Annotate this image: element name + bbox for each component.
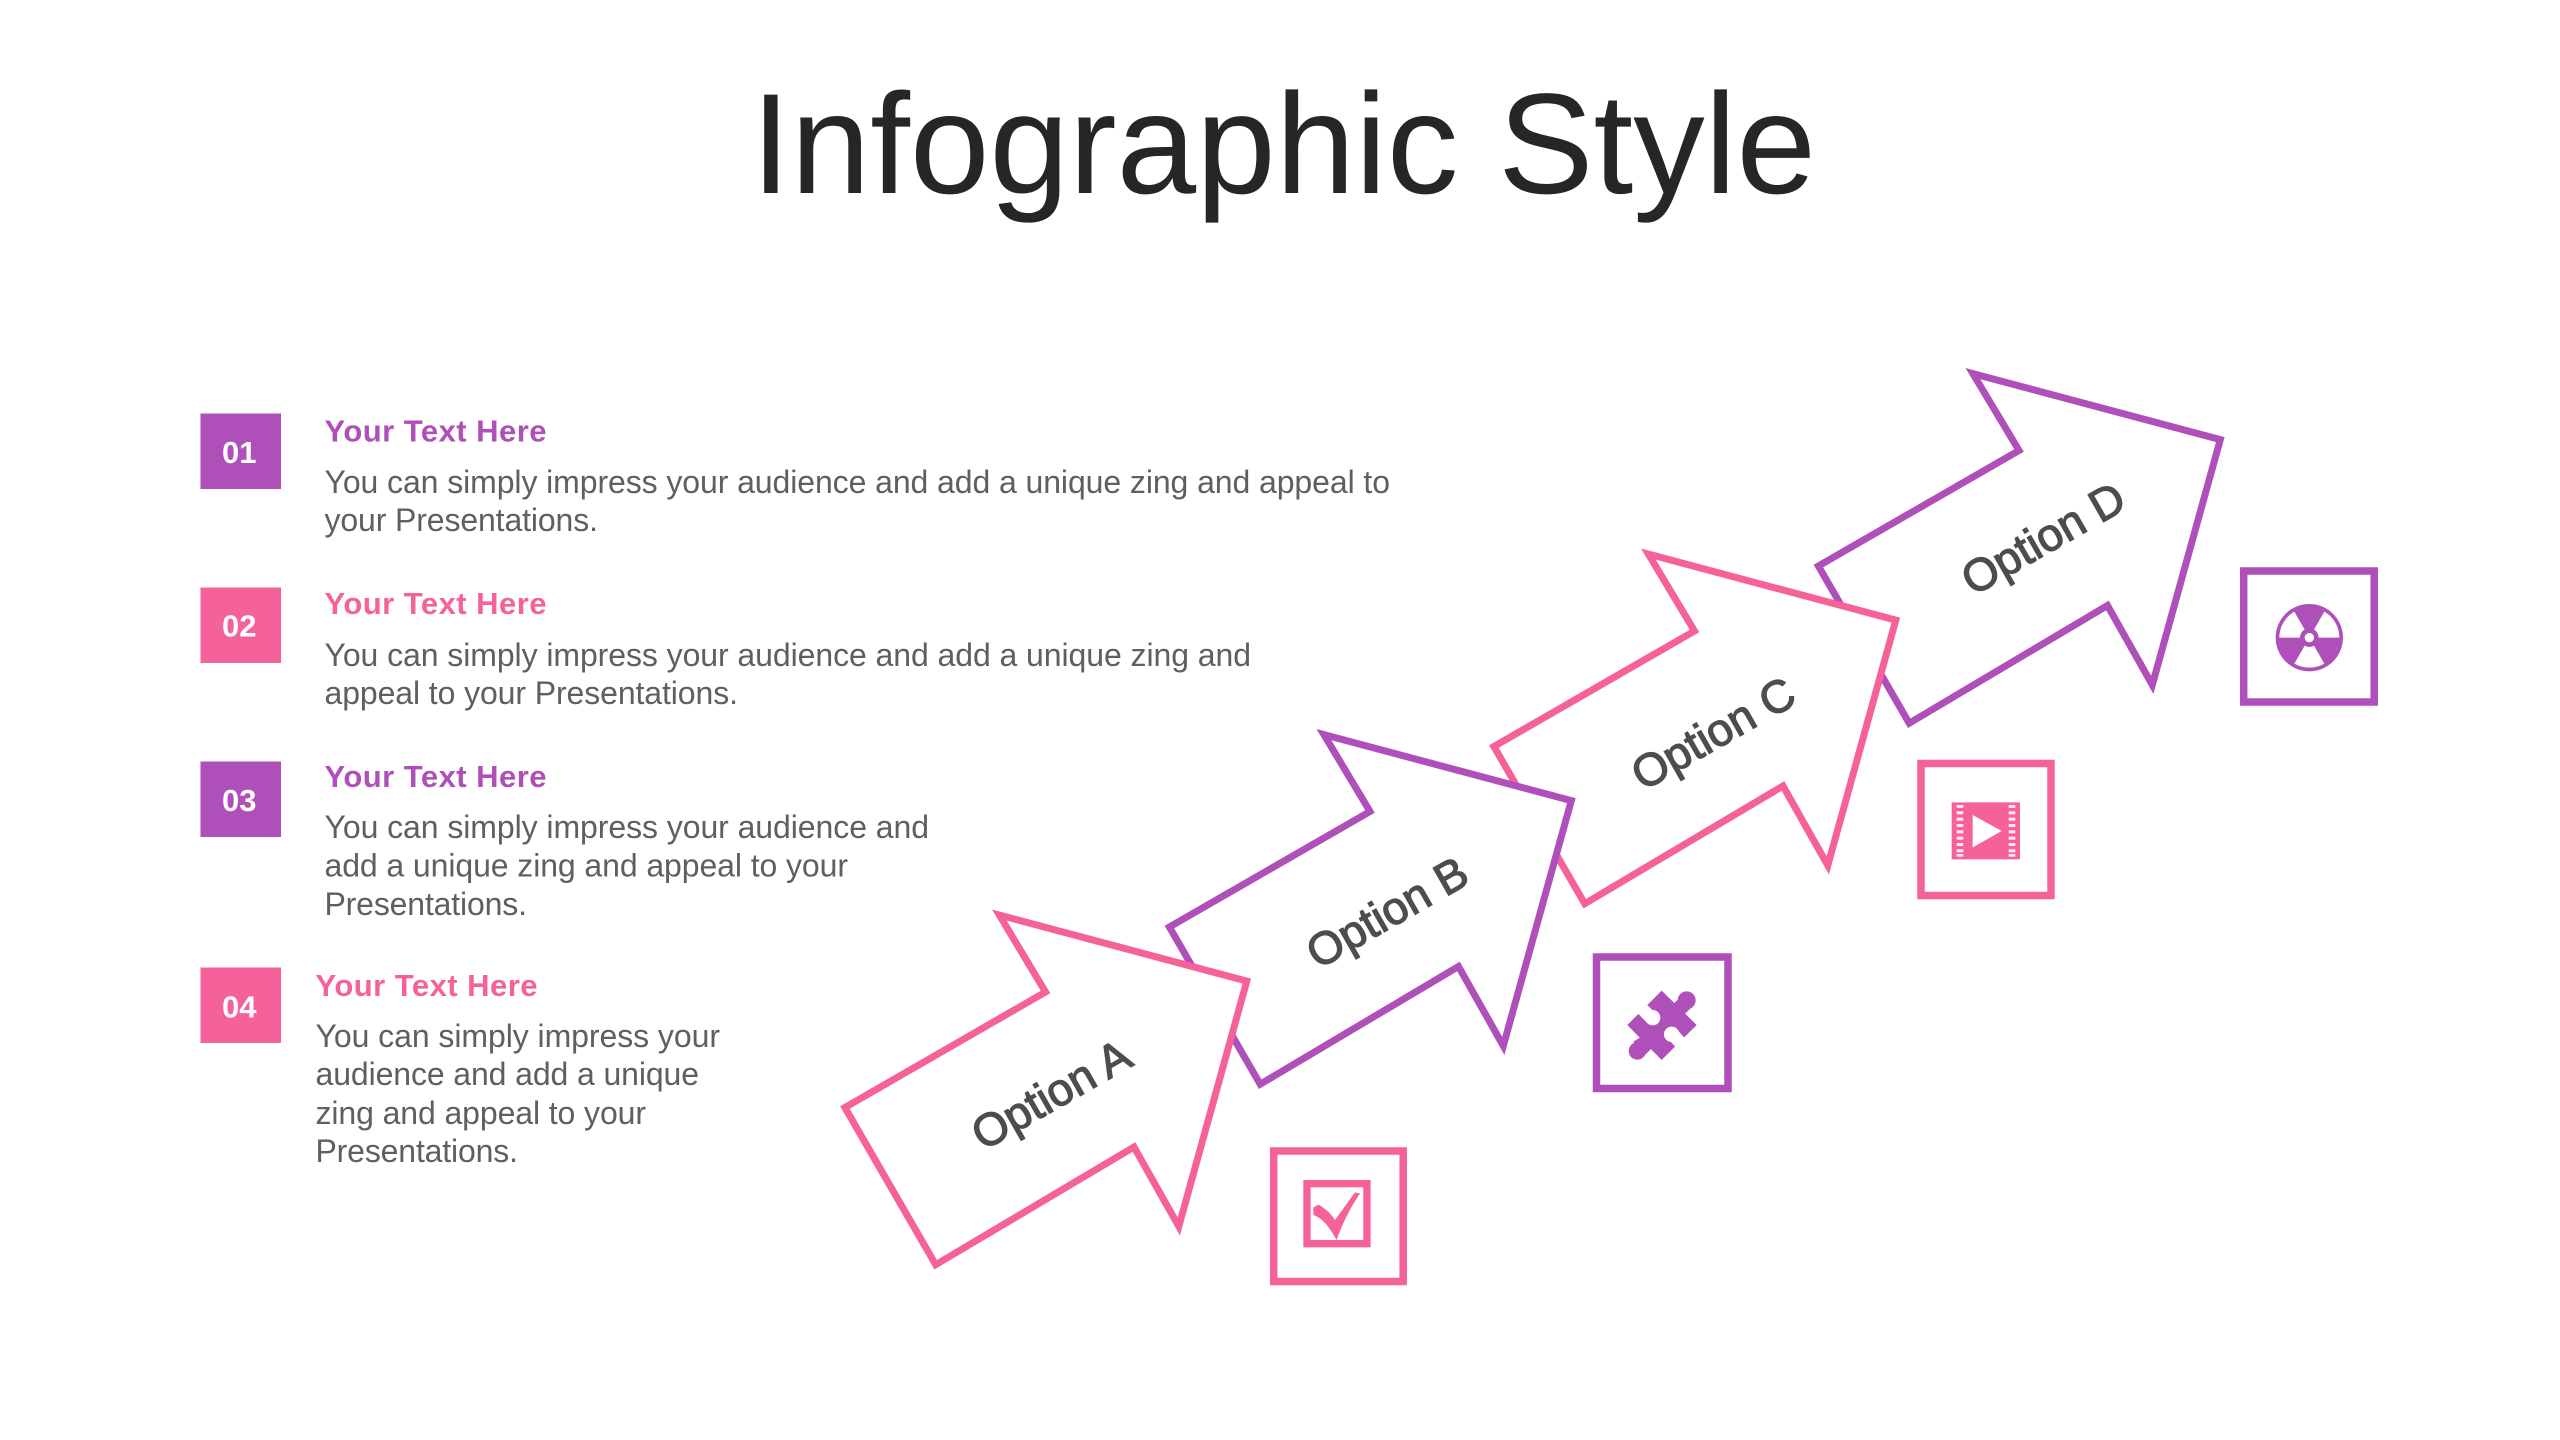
arrow: option A: Option A [963, 1029, 1140, 1160]
list item 03 [200, 759, 929, 922]
arrow: option A [845, 915, 1247, 1265]
body text 02 [324, 637, 1251, 711]
arrow: option D [1818, 374, 2220, 723]
icon box: checkmark [1274, 1151, 1403, 1282]
body text 04: Presentations. [316, 1133, 518, 1169]
body text 03: add a unique zing and appeal to your [324, 848, 848, 884]
body text 04: audience and add a unique [316, 1056, 699, 1092]
arrow: option C [1494, 554, 1896, 904]
heading 02: Your Text Here [324, 586, 546, 621]
number badge 04 [200, 968, 281, 1043]
arrow: option B [1169, 735, 1571, 1084]
number badge 01: 01 [222, 435, 256, 470]
body text 03: You can simply impress your audience and [324, 809, 929, 845]
list item 02 [200, 586, 1251, 711]
body text 02: You can simply impress your audience and add a unique zing and [324, 637, 1251, 673]
number badge 02: 02 [222, 608, 256, 644]
body text 01: your Presentations. [324, 502, 598, 538]
list item 04 [200, 968, 720, 1169]
number badge 03 [200, 762, 281, 837]
heading 04: Your Text Here [316, 968, 538, 1003]
number badge 03: 03 [222, 783, 256, 818]
arrow: option C: Option C [1623, 667, 1804, 800]
icon box: video film [1921, 764, 2051, 896]
heading 01: Your Text Here [324, 414, 546, 448]
arrow: option B: Option B [1298, 846, 1477, 978]
number badge 04: 04 [222, 990, 257, 1024]
body text 03: Presentations. [324, 886, 527, 922]
icon box: radiation symbol [2244, 571, 2374, 702]
body text 01: You can simply impress your audience and add a unique zing and appeal to [324, 464, 1390, 500]
body text 03 [324, 809, 929, 922]
title: Infographic Style [751, 65, 1816, 224]
heading 03: Your Text Here [324, 759, 546, 794]
list item 01 [200, 414, 1390, 538]
body text 04: You can simply impress your [316, 1018, 720, 1054]
body text 01 [324, 464, 1390, 538]
body text 02: appeal to your Presentations. [324, 675, 738, 711]
arrow: option D: Option D [1953, 472, 2134, 605]
body text 04 [316, 1018, 720, 1169]
number badge 01 [200, 414, 281, 489]
number badge 02 [200, 588, 281, 663]
body text 04: zing and appeal to your [316, 1095, 646, 1131]
icon box: puzzle piece [1596, 957, 1728, 1088]
